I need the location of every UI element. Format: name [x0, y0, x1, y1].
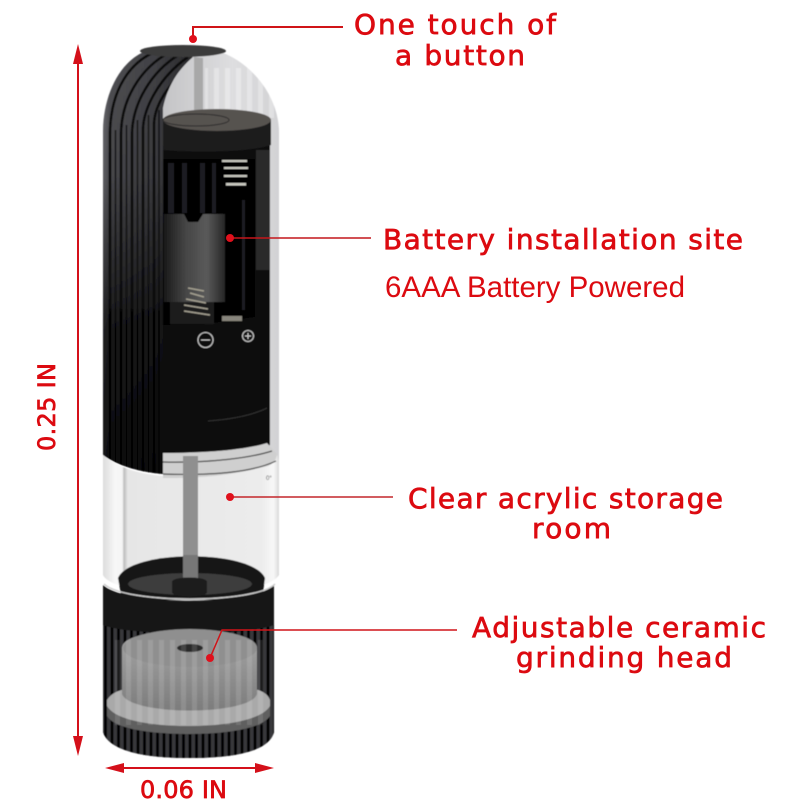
- black ribbed outer shell: [102, 52, 194, 475]
- grinder product illustration: [100, 44, 279, 758]
- shell base colour: [102, 52, 194, 474]
- rod upper section over bowl: [183, 555, 198, 580]
- label: grinding head: grinding head: [516, 641, 732, 674]
- cylinder upper band: [163, 120, 271, 152]
- label: acrylic: Clear acrylic storage: [408, 482, 723, 515]
- rod nut: [172, 578, 207, 596]
- label: 6AAA battery: 6AAA Battery Powered: [385, 271, 685, 304]
- plate lower edge: [107, 706, 270, 734]
- lower contact block: [170, 302, 214, 324]
- plus symbol: [242, 330, 254, 342]
- central rod: [183, 456, 198, 578]
- minus symbol: [198, 332, 213, 348]
- battery window: [163, 159, 255, 325]
- callout: grinding head: [206, 611, 766, 674]
- inner black cylinder: [163, 120, 270, 458]
- label: acrylic: room: [532, 512, 611, 545]
- right wall: [256, 150, 270, 270]
- height label: 0.25 IN: [33, 363, 61, 451]
- height arrow: [73, 44, 83, 756]
- dark inner bowl: [118, 556, 265, 600]
- shell ghost ribs: [205, 68, 275, 118]
- button ring: [163, 114, 229, 126]
- clear acrylic chamber: [103, 455, 279, 594]
- base ribs: [103, 625, 274, 758]
- base highlight rim: [104, 584, 275, 599]
- top button: [140, 45, 226, 57]
- callout: one touch: [189, 8, 557, 72]
- ceramic hole: [177, 644, 203, 652]
- straight rib infill: [116, 110, 159, 480]
- ceramic top: [123, 629, 257, 667]
- cylinder lid: [163, 109, 271, 131]
- lower contact: [222, 316, 242, 321]
- label: battery site: Battery installation site: [383, 223, 743, 256]
- shell darkening: [102, 58, 185, 474]
- top spring: [222, 160, 248, 186]
- callout: acrylic: [226, 482, 723, 545]
- width arrow: [105, 763, 274, 773]
- ceramic rib shine: [112, 640, 267, 725]
- grey ceramic cylinder: [122, 630, 257, 710]
- seam line: [208, 408, 267, 421]
- motor: [164, 214, 225, 302]
- curved shell ribs: [110, 50, 196, 480]
- shell inner ridge: [194, 57, 203, 110]
- lower spring: [184, 288, 210, 315]
- label: one touch: One touch of: [354, 8, 557, 41]
- label: one touch: a button: [395, 39, 525, 72]
- callout: battery: [226, 223, 743, 256]
- black grinder base: [103, 585, 274, 758]
- plate: [107, 688, 270, 727]
- translucent right shell: [163, 48, 279, 460]
- collar shadow line: [163, 451, 276, 474]
- scale mark: 0°: [266, 476, 272, 482]
- label: grinding head: Adjustable ceramic: [472, 611, 766, 644]
- bowl floor: [128, 573, 252, 595]
- battery bars: [168, 163, 245, 310]
- chrome collar: [163, 443, 277, 478]
